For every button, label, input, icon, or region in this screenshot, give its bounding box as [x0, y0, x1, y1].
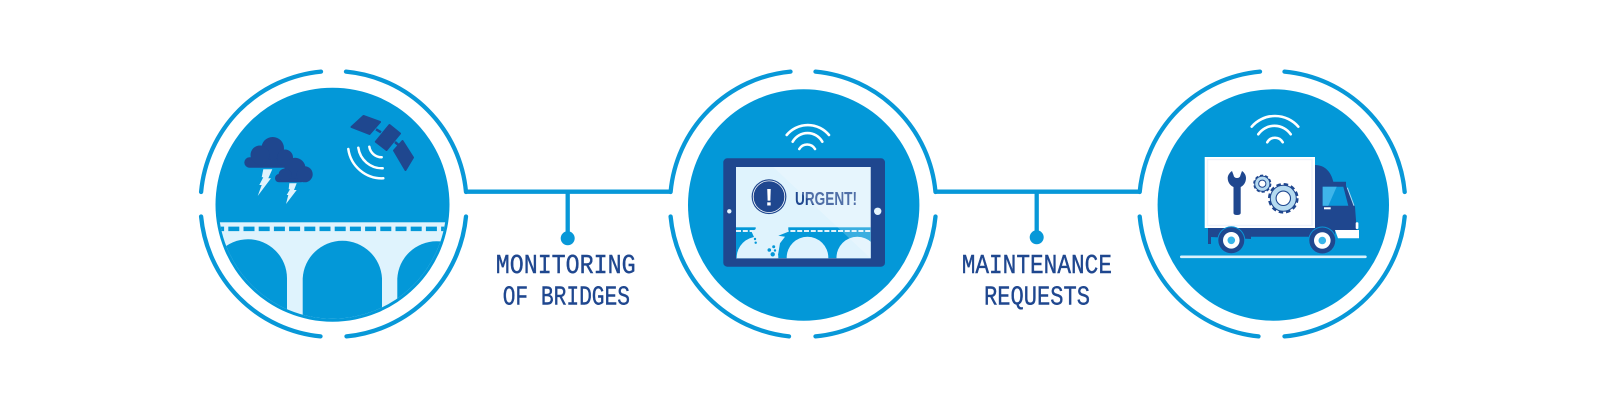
truck	[1205, 157, 1359, 254]
truck cargo box	[1205, 157, 1315, 228]
icon: wifi signal	[1252, 116, 1298, 142]
blue disc 1	[216, 88, 450, 322]
panel: urgent alert	[671, 72, 936, 336]
road line	[1180, 256, 1367, 258]
heading: monitoring of bridges: OF BRIDGES	[503, 284, 630, 314]
blue disc 2	[688, 89, 919, 321]
tablet	[723, 158, 885, 278]
heading: monitoring of bridges: MONITORING	[496, 252, 636, 282]
panel: bridge monitoring	[201, 72, 476, 336]
icon: bridge	[220, 222, 446, 319]
outer ring 2	[671, 72, 936, 336]
front wheel	[1308, 226, 1336, 254]
connector: maintenance requests	[936, 192, 1140, 244]
screen glare	[773, 167, 871, 258]
heading: maintenance requests: MAINTENANCE	[962, 252, 1112, 282]
truck chassis	[1208, 228, 1335, 244]
truck cab	[1315, 165, 1359, 238]
panel: maintenance truck	[1140, 72, 1405, 336]
icon: storm clouds	[244, 137, 313, 204]
tablet camera	[727, 209, 732, 214]
connector: monitoring of bridges	[466, 192, 671, 245]
heading: monitoring of bridges	[496, 252, 636, 314]
urgent text: URGENT!	[795, 189, 857, 209]
outer ring 1	[201, 72, 466, 336]
icon: small gear	[1254, 176, 1270, 192]
tablet screen	[736, 167, 871, 258]
blue disc 3	[1158, 89, 1389, 321]
outer ring 3	[1140, 72, 1405, 336]
alert badge: !	[765, 184, 773, 211]
icon: large gear	[1270, 185, 1297, 212]
icon: satellite	[348, 116, 413, 178]
icon: wrench	[1228, 171, 1246, 215]
heading: maintenance requests: REQUESTS	[984, 284, 1090, 314]
tablet home button	[874, 208, 881, 215]
alert badge	[752, 179, 786, 214]
rear wheel	[1217, 226, 1245, 254]
heading: maintenance requests	[962, 252, 1112, 314]
icon: wifi signal	[787, 125, 829, 149]
damaged bridge on screen	[736, 227, 871, 258]
